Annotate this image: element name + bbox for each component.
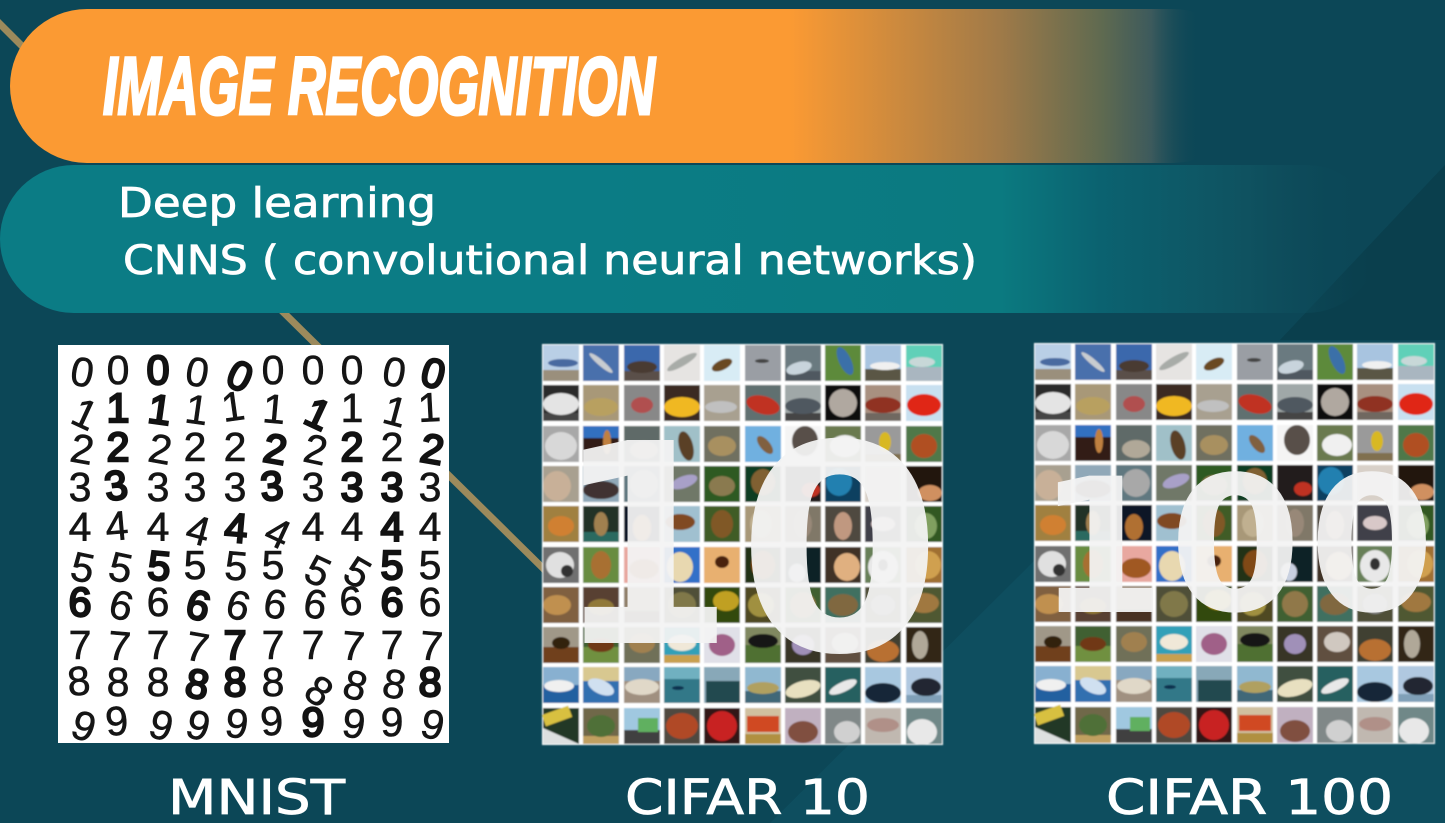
large number 100: 1 <box>1037 438 1166 656</box>
panel: MNIST digit grid: 00 0 0000000 <box>67 347 450 402</box>
diagonal gold accent line <box>0 18 560 585</box>
large number 10: 1 <box>554 385 735 709</box>
subtitle text <box>118 179 977 284</box>
panel: MNIST digit grid: 7777 7 77777 <box>69 622 445 672</box>
panel: CIFAR 100 image grid with large 100 <box>1034 343 1435 744</box>
large number 100: 0 <box>1309 437 1435 655</box>
panel: MNIST digit grid: 22 222 222 2 2 <box>67 424 447 475</box>
title: IMAGE RECOGNITION <box>103 41 656 132</box>
panel: MNIST digit grid: 44 4 44444 4 4 <box>69 502 441 559</box>
panel: CIFAR 10 image grid with large 10 <box>542 344 943 745</box>
panel: MNIST digit grid: 888 8 8 88888 <box>65 657 441 716</box>
large number 10: 0 <box>737 384 942 718</box>
orange title banner <box>10 9 1250 163</box>
panel: MNIST digit grid: 11 11111111 <box>65 382 442 440</box>
subtitle text: Deep learning <box>118 179 436 227</box>
panel: MNIST digit grid <box>58 345 450 752</box>
large number 100 <box>1037 437 1435 656</box>
panel: MNIST digit grid: 999999 9 999 <box>66 697 449 752</box>
large number 10 <box>554 384 942 718</box>
subtitle text: CNNS ( convolutional neural networks) <box>123 238 977 284</box>
large number 100: 0 <box>1169 437 1302 655</box>
panel: MNIST digit grid: 33 333 3 3 3 3 3 <box>69 461 441 510</box>
panel: MNIST digit grid: 6 66 66666 6 6 <box>69 577 441 631</box>
teal subtitle banner <box>0 165 1380 313</box>
panel: MNIST digit grid: 555 555555 5 <box>67 542 441 598</box>
